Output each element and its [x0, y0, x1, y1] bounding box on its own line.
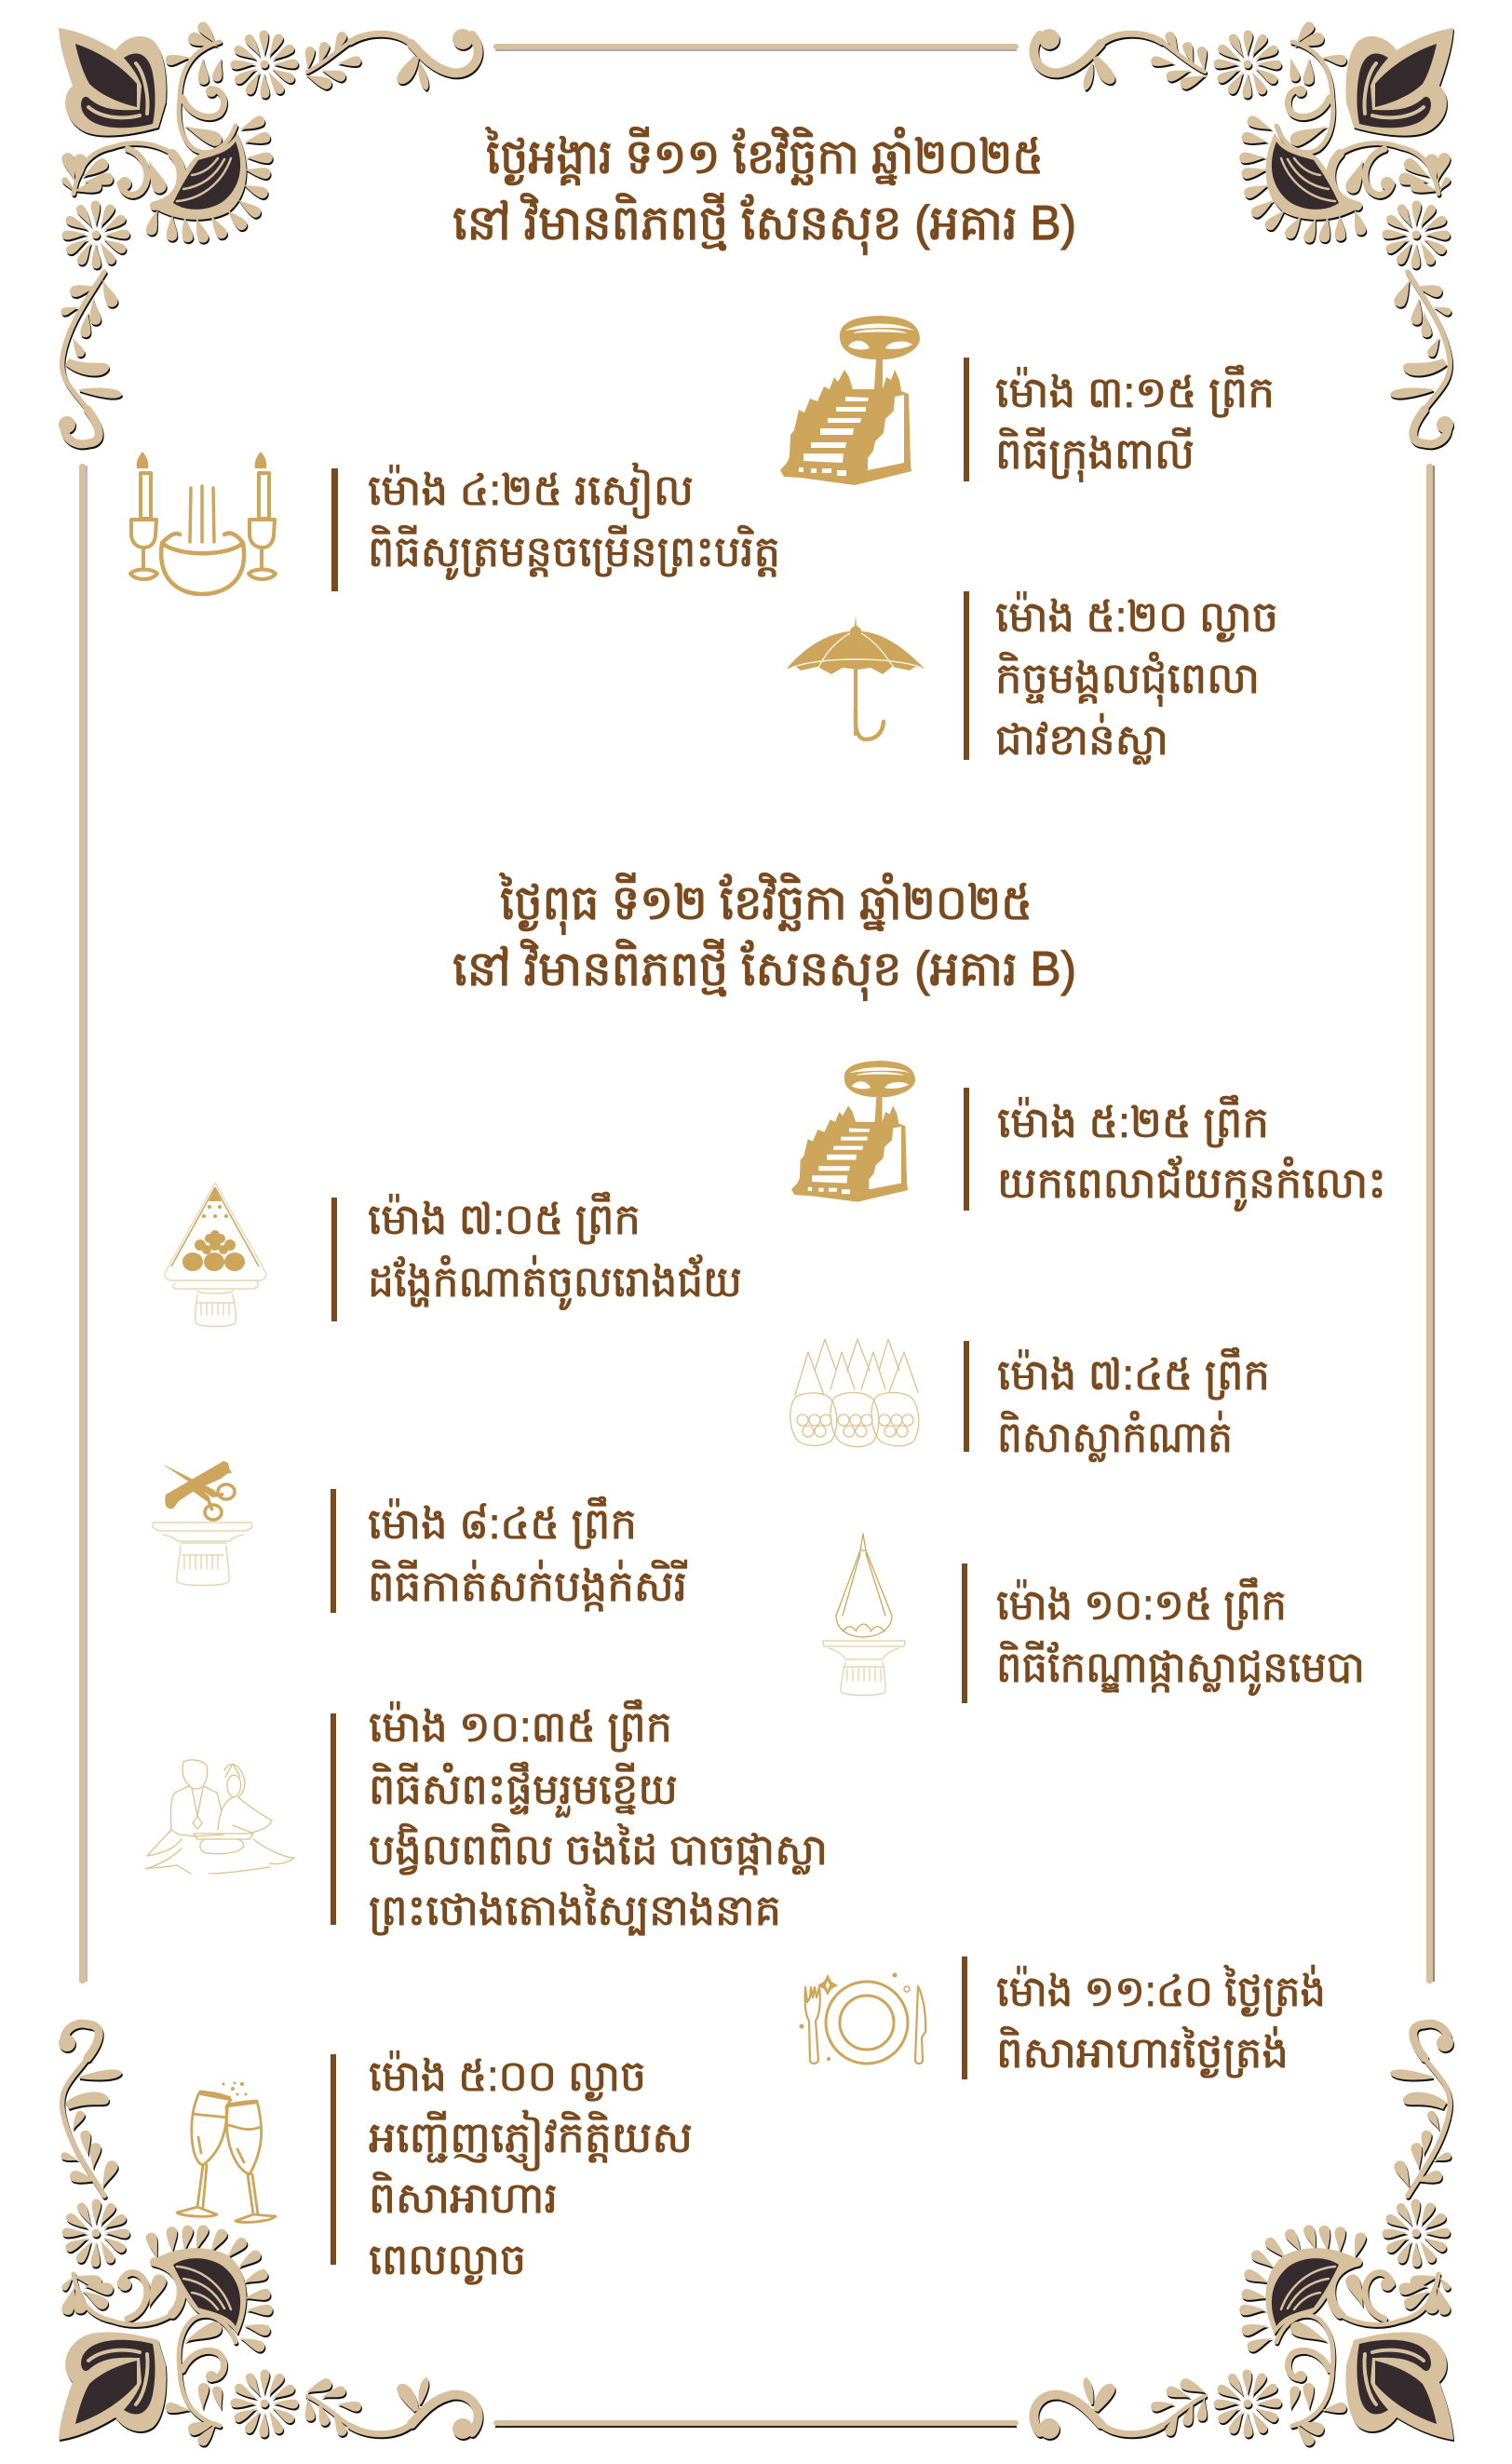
schedule item: 5:00 evening: ម៉ោង ៥:០០ ល្ងាច: [369, 2051, 646, 2102]
schedule item: 11:40 midday: ម៉ោង ១១:៤០ ថ្ងៃត្រង់: [996, 1965, 1326, 2017]
icon: comb and scissors on tray: [153, 1461, 252, 1585]
schedule item: 7:05 morning: ដង្ហែកំណាត់ចូលរោងជ័យ: [368, 1254, 742, 1310]
schedule item: 7:05 morning: [331, 1192, 742, 1321]
corner ornament: bottom left: [59, 2024, 479, 2448]
schedule item: 5:20 evening: [964, 591, 1278, 765]
schedule item: 4:25 afternoon: ពិធីសូត្រមន្តចម្រើនព្រះបរិត្ត: [368, 525, 780, 580]
schedule item: 10:15 morning: ពិធីកែណ្ឌាផ្កាស្លាជូនមេបា: [996, 1641, 1365, 1696]
schedule item: 5:25 morning: យកពេលាជ័យកូនកំលោះ: [997, 1156, 1386, 1212]
schedule item: 5:20 evening: ជាវខាន់ស្លា: [995, 713, 1168, 765]
icon: flower cone on tray: [823, 1534, 905, 1695]
corner ornament: top left: [59, 20, 479, 444]
icon: umbrella: [787, 616, 925, 739]
schedule item: 10:35 morning: បង្វិលពពិល ចងដៃ បាចផ្កាស្លា: [369, 1823, 828, 1875]
icon: plate with fork and knife: [799, 1972, 925, 2064]
schedule item: 10:15 morning: [962, 1564, 1365, 1703]
schedule item: 10:35 morning: ពិធីសំពះផ្ទឹមរួមខ្នើយ: [369, 1762, 678, 1818]
corner ornament: top right: [1033, 20, 1453, 444]
schedule item: 10:35 morning: ព្រះថោងតោងស្បៃនាងនាគ: [369, 1884, 781, 1936]
schedule item: 4:25 afternoon: [331, 463, 780, 591]
schedule item: 8:45 morning: [331, 1489, 687, 1613]
heading: day two: នៅ វិមានពិភពថ្មី សែនសុខ (អគារ B): [452, 939, 1076, 1001]
heading: day two: [452, 873, 1076, 1001]
heading: day one: ថ្ងៃអង្គារ ទី១១ ខែវិច្ឆិកា ឆ្នាំ២០២៥: [485, 127, 1044, 185]
schedule item: 7:45 morning: ពិសាស្លាកំណាត់: [997, 1411, 1233, 1462]
schedule item: 5:25 morning: ម៉ោង ៥:២៥ ព្រឹក: [997, 1095, 1269, 1148]
heading: day one: [452, 127, 1076, 255]
schedule item: 7:05 morning: ម៉ោង ៧:០៥ ព្រឹក: [368, 1192, 641, 1245]
schedule item: 11:40 midday: [962, 1956, 1326, 2079]
schedule item: 8:45 morning: ពិធីកាត់សក់បង្កក់សិរី: [368, 1560, 687, 1612]
schedule item: 5:25 morning: [964, 1088, 1386, 1212]
schedule item: 5:00 evening: ពិសាអាហារ: [369, 2172, 558, 2222]
schedule item: 5:20 evening: ម៉ោង ៥:២០ ល្ងាច: [995, 591, 1278, 643]
schedule item: 11:40 midday: ពិសាអាហារថ្ងៃត្រង់: [996, 2026, 1289, 2078]
schedule item: 10:35 morning: [331, 1699, 828, 1936]
schedule item: 5:00 evening: អញ្ជើញភ្ញៀវកិត្តិយស: [369, 2110, 693, 2172]
schedule item: 3:15 morning: [964, 358, 1275, 482]
schedule item: 8:45 morning: ម៉ោង ៨:៤៥ ព្រឹក: [368, 1496, 637, 1550]
heading: day two: ថ្ងៃពុធ ទី១២ ខែវិច្ឆិកា ឆ្នាំ២០២៥: [499, 873, 1033, 935]
schedule item: 7:45 morning: [964, 1341, 1270, 1462]
icon: bride and groom line drawing: [145, 1760, 294, 1874]
corner ornament: bottom right: [1033, 2024, 1453, 2448]
schedule item: 3:15 morning: ម៉ោង ៣:១៥ ព្រឹក: [995, 365, 1275, 418]
icon: champagne glasses: [177, 2082, 276, 2222]
schedule item: 5:00 evening: ពេលល្ងាច: [369, 2235, 526, 2285]
schedule item: 5:20 evening: កិច្ចមង្គលជុំពេលា: [995, 652, 1260, 707]
schedule item: 3:15 morning: ពិធីក្រុងពាលី: [995, 427, 1195, 482]
heading: day one: នៅ វិមានពិភពថ្មី សែនសុខ (អគារ B): [452, 193, 1076, 255]
schedule item: 10:15 morning: ម៉ោង ១០:១៥ ព្រឹក: [996, 1577, 1287, 1631]
icon: candles and incense bowl: [130, 452, 276, 594]
schedule item: 10:35 morning: ម៉ោង ១០:៣៥ ព្រឹក: [369, 1699, 672, 1753]
schedule item: 7:45 morning: ម៉ោង ៧:៤៥ ព្រឹក: [997, 1347, 1270, 1401]
schedule item: 5:00 evening: [331, 2051, 693, 2285]
icon: offering stairs, small: [791, 1061, 915, 1202]
icon: fruit tray with triangle cover: [165, 1183, 266, 1326]
icon: three baskets with cones: [790, 1339, 919, 1447]
icon: offering stairs: [780, 316, 920, 485]
schedule item: 4:25 afternoon: ម៉ោង ៤:២៥ រសៀល: [368, 463, 694, 519]
